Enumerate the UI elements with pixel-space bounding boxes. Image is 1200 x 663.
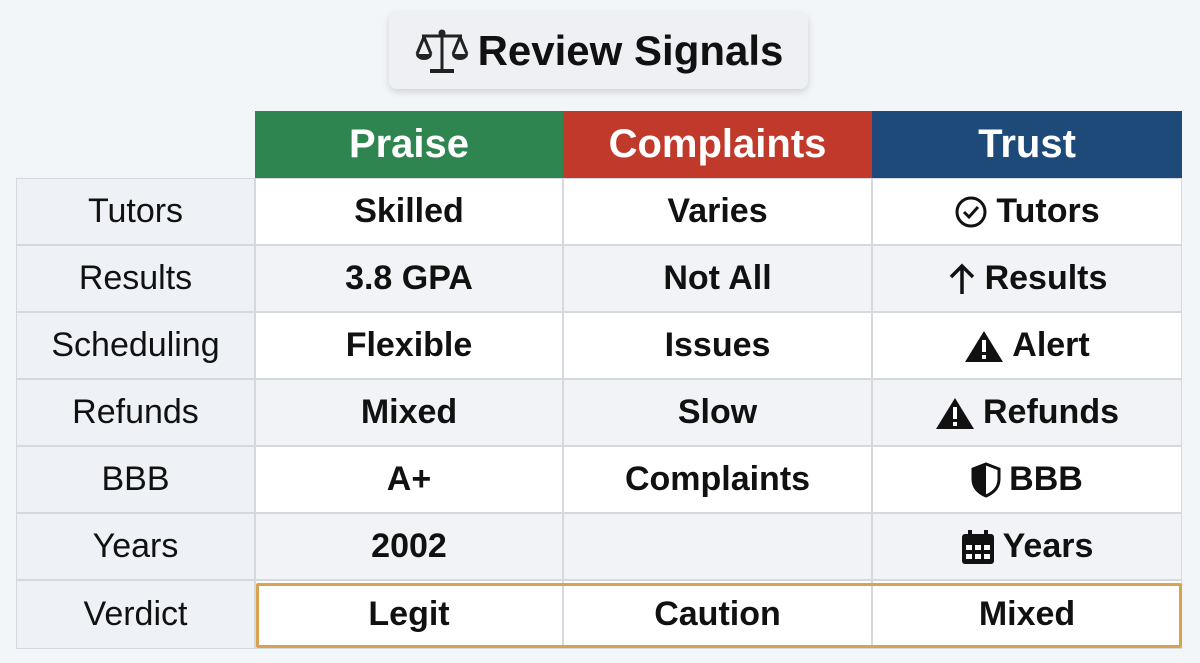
row: Refunds: Refunds (983, 393, 1119, 431)
row: BBB: BBB (101, 460, 170, 498)
row: Verdict: Verdict (84, 595, 187, 633)
row: Refunds: Refunds (72, 393, 199, 431)
header: Praise (255, 111, 563, 178)
row: Tutors (16, 178, 1182, 245)
row: Scheduling (16, 312, 1182, 379)
title (389, 12, 808, 89)
header: Trust: Trust (978, 122, 1076, 166)
icon: scales (416, 30, 468, 73)
row: BBB: A+ (387, 460, 431, 498)
row: Scheduling: Scheduling (51, 326, 220, 364)
row: Scheduling: Flexible (346, 326, 472, 364)
row: Results: 3.8 GPA (345, 259, 473, 297)
verdict highlight border (256, 583, 1182, 648)
row: Years: Years (1003, 527, 1093, 565)
row: Tutors: Varies (667, 192, 768, 230)
row: Results: Not All (663, 259, 772, 297)
row: Results: Results (985, 259, 1107, 297)
header: Praise: Praise (349, 122, 469, 166)
row: Verdict: Caution (654, 595, 781, 633)
row: Tutors: Tutors (88, 192, 183, 230)
row: Years (16, 513, 1182, 580)
row: Scheduling: Issues (665, 326, 770, 364)
table (16, 111, 1182, 649)
row: BBB: Complaints (625, 460, 810, 498)
row: Verdict (16, 580, 1182, 649)
row: Verdict: Legit (368, 595, 450, 633)
row: Years: Years (93, 527, 178, 565)
row: Refunds (16, 379, 1182, 446)
row: Refunds: Mixed (361, 393, 457, 431)
row: BBB: BBB (1009, 460, 1083, 498)
title: Review Signals (478, 26, 783, 74)
row: Tutors: Tutors (996, 192, 1100, 230)
row: Results (16, 245, 1182, 312)
header: Complaints (563, 111, 872, 178)
row: Years: 2002 (371, 527, 447, 565)
row: Tutors: Skilled (354, 192, 464, 230)
row: Refunds: Slow (678, 393, 757, 431)
header: Trust (872, 111, 1182, 178)
row: Scheduling: Alert (1012, 326, 1090, 364)
row: Results: Results (79, 259, 192, 297)
header: Complaints: Complaints (609, 122, 826, 166)
row: BBB (16, 446, 1182, 513)
row: Verdict: Mixed (979, 595, 1075, 633)
